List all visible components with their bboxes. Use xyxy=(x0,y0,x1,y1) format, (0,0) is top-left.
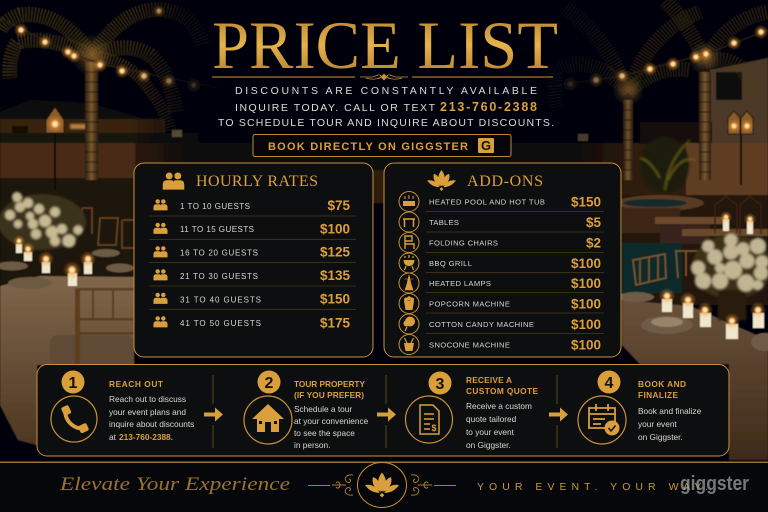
string light bulbs right xyxy=(563,25,768,91)
panel: hourly rates xyxy=(134,163,373,357)
left candles xyxy=(13,235,96,286)
right table xyxy=(622,300,768,460)
rate row 3: $125 xyxy=(320,244,350,260)
icon: phone xyxy=(61,405,89,434)
left house xyxy=(0,100,165,137)
icon: lotus xyxy=(427,170,456,191)
heading: HOURLY RATES xyxy=(196,173,318,190)
rate row 5: $150 xyxy=(320,292,350,306)
step 2: tour property: at your convenience xyxy=(294,416,369,426)
add-on: cotton candy machine: COTTON CANDY MACHINE xyxy=(429,320,534,329)
step 1: reach out: inquire about discounts xyxy=(109,419,194,429)
icon: quote document: $ xyxy=(431,423,437,433)
step 1: reach out: 213-760-2388. xyxy=(119,432,173,442)
rate row 4: $135 xyxy=(320,268,350,283)
right lower courtyard xyxy=(622,195,768,305)
step 2: tour property: (IF YOU PREFER) xyxy=(294,390,364,400)
rate row 2 xyxy=(153,222,350,236)
step 2: tour property: to see the space xyxy=(294,428,355,438)
add-on: cotton candy machine xyxy=(399,314,601,334)
step 1: reach out: Reach out to discuss xyxy=(109,394,186,404)
string light bulbs left xyxy=(14,5,201,92)
step 4: book and finalize xyxy=(578,370,702,444)
add-on: snocone machine xyxy=(399,334,601,354)
add-on: folding chairs: $2 xyxy=(586,236,601,250)
icon: giggster G: G xyxy=(481,138,491,153)
add-on: popcorn machine xyxy=(399,294,601,314)
step 4: book and finalize: FINALIZE xyxy=(638,390,678,400)
step 4: book and finalize: BOOK AND xyxy=(638,379,686,389)
step 3: receive a custom quote: 3 xyxy=(436,376,445,393)
step 4: book and finalize: on Giggster. xyxy=(638,432,683,442)
step 4: book and finalize: your event xyxy=(638,419,677,429)
add-on: tables xyxy=(399,212,601,232)
left plates xyxy=(0,249,134,289)
add-on: popcorn machine: $100 xyxy=(571,296,601,312)
panel: booking steps xyxy=(37,364,729,456)
icon: giggster G xyxy=(478,138,494,153)
add-on: heated pool and hot tub xyxy=(399,192,601,212)
palm trunks xyxy=(85,62,711,180)
rate row 6 xyxy=(153,316,350,330)
rate row 1: $75 xyxy=(327,198,350,213)
add-on: heated pool and hot tub: $150 xyxy=(571,194,601,210)
booking button: BOOK DIRECTLY ON GIGGSTER xyxy=(268,141,468,153)
add-on: bbq grill xyxy=(399,253,601,273)
shrub xyxy=(640,137,696,193)
rate row 4 xyxy=(153,268,350,283)
pool xyxy=(622,243,682,293)
step 2: tour property xyxy=(244,370,369,450)
rate row 2: 11 TO 15 GUESTS xyxy=(180,225,254,234)
step 3: receive a custom quote xyxy=(406,372,538,450)
add-on: heated lamps: $100 xyxy=(571,276,601,291)
add-on: bbq grill: BBQ GRILL xyxy=(429,259,472,268)
add-on: heated lamps xyxy=(399,273,601,293)
add-on: folding chairs: FOLDING CHAIRS xyxy=(429,238,498,248)
rate row 3 xyxy=(153,244,350,260)
left lantern xyxy=(46,107,64,190)
script tagline: Elevate Your Experience xyxy=(59,474,290,495)
step 3: receive a custom quote: to your event xyxy=(466,427,515,437)
step 2: tour property: TOUR PROPERTY xyxy=(294,379,365,389)
left chair xyxy=(50,288,134,365)
title ornament divider xyxy=(212,74,553,80)
palm fronds left xyxy=(0,10,203,130)
left floral centerpiece xyxy=(0,192,86,250)
step 3: receive a custom quote: CUSTOM QUOTE xyxy=(466,386,538,396)
step 1: reach out: at xyxy=(109,432,118,442)
right floral centerpiece xyxy=(691,234,768,320)
add-on: folding chairs xyxy=(399,232,601,252)
icon: group xyxy=(163,173,184,190)
step 1: reach out: 1 xyxy=(69,375,78,392)
step 3: receive a custom quote: quote tailored xyxy=(466,414,517,424)
string light wires xyxy=(0,18,768,88)
left table xyxy=(0,276,134,445)
heading: ADD-ONS xyxy=(467,173,543,190)
add-on: tables: TABLES xyxy=(429,218,459,227)
rate row 1: 1 TO 10 GUESTS xyxy=(180,202,250,211)
rate row 6: $175 xyxy=(320,316,350,330)
add-on: cotton candy machine: $100 xyxy=(571,317,601,332)
step 3: receive a custom quote: Receive a custom xyxy=(466,401,532,411)
giggster watermark: giggster xyxy=(680,473,749,495)
left back chairs xyxy=(81,208,134,248)
panel: add-ons xyxy=(384,163,621,357)
intro text xyxy=(218,85,554,129)
add-on: tables: $5 xyxy=(586,215,601,230)
rate row 6: 41 TO 50 GUESTS xyxy=(180,319,261,328)
add-on: heated lamps: HEATED LAMPS xyxy=(429,279,491,288)
add-on: snocone machine: SNOCONE MACHINE xyxy=(429,340,510,350)
hot tub and steps xyxy=(616,195,768,244)
rate row 5: 31 TO 40 GUESTS xyxy=(180,296,261,304)
booking button xyxy=(253,134,511,156)
right building windows xyxy=(716,72,742,100)
right plates xyxy=(618,292,768,351)
add-on: bbq grill: $100 xyxy=(571,256,601,271)
hedges xyxy=(0,133,220,145)
step 3: receive a custom quote: RECEIVE A xyxy=(466,375,512,385)
title: PRICE LIST xyxy=(212,7,558,83)
palm fronds right xyxy=(554,0,768,110)
palm crown glow left xyxy=(72,35,112,75)
rate row 2: $100 xyxy=(320,222,350,236)
right wall xyxy=(686,143,768,213)
step 2: tour property: in person. xyxy=(294,440,330,450)
add-on: snocone machine: $100 xyxy=(571,338,601,352)
intro text: DISCOUNTS ARE CONSTANTLY AVAILABLE xyxy=(235,85,537,97)
icon: house xyxy=(252,404,284,432)
left wall glow xyxy=(0,143,135,183)
step 4: book and finalize: Book and finalize xyxy=(638,406,702,416)
footer emblem xyxy=(308,462,456,508)
rate row 3: 16 TO 20 GUESTS xyxy=(180,248,258,258)
step 1: reach out xyxy=(51,370,194,442)
step 3: receive a custom quote: on Giggster. xyxy=(466,440,511,450)
rate row 5 xyxy=(153,292,350,306)
step 2: tour property: 2 xyxy=(265,375,274,392)
icon: calendar check xyxy=(589,404,620,436)
rate row 1 xyxy=(153,198,350,213)
step 1: reach out: your event plans and xyxy=(109,407,186,417)
intro text: INQUIRE TODAY. CALL OR TEXT xyxy=(235,102,436,114)
right building xyxy=(710,58,768,145)
arrow 2 xyxy=(377,408,396,422)
step 2: tour property: Schedule a tour xyxy=(294,404,352,414)
dim lanterns xyxy=(172,130,588,141)
footer slogan: YOUR EVENT. YOUR WAY. xyxy=(477,481,708,493)
right candles xyxy=(659,196,766,339)
arrow 3 xyxy=(549,408,568,422)
right building low roof xyxy=(640,122,712,144)
add-on: heated pool and hot tub: HEATED POOL AND HOT TUB xyxy=(429,198,545,206)
step 4: book and finalize: 4 xyxy=(605,375,614,392)
right lantern xyxy=(727,111,754,185)
palm crown glow right xyxy=(613,42,721,105)
add-on: popcorn machine: POPCORN MACHINE xyxy=(429,300,510,308)
arrow 1 xyxy=(204,408,223,422)
garden wall xyxy=(0,143,768,203)
center dark overlay xyxy=(130,0,636,170)
rate row 4: 21 TO 30 GUESTS xyxy=(180,272,258,281)
footer band xyxy=(0,462,768,512)
step 1: reach out: REACH OUT xyxy=(109,379,163,389)
intro text: TO SCHEDULE TOUR AND INQUIRE ABOUT DISCOUNTS. xyxy=(218,117,554,129)
left garden shadow xyxy=(0,178,135,288)
phone number: 213-760-2388 xyxy=(440,100,537,114)
right chairs xyxy=(633,251,698,285)
